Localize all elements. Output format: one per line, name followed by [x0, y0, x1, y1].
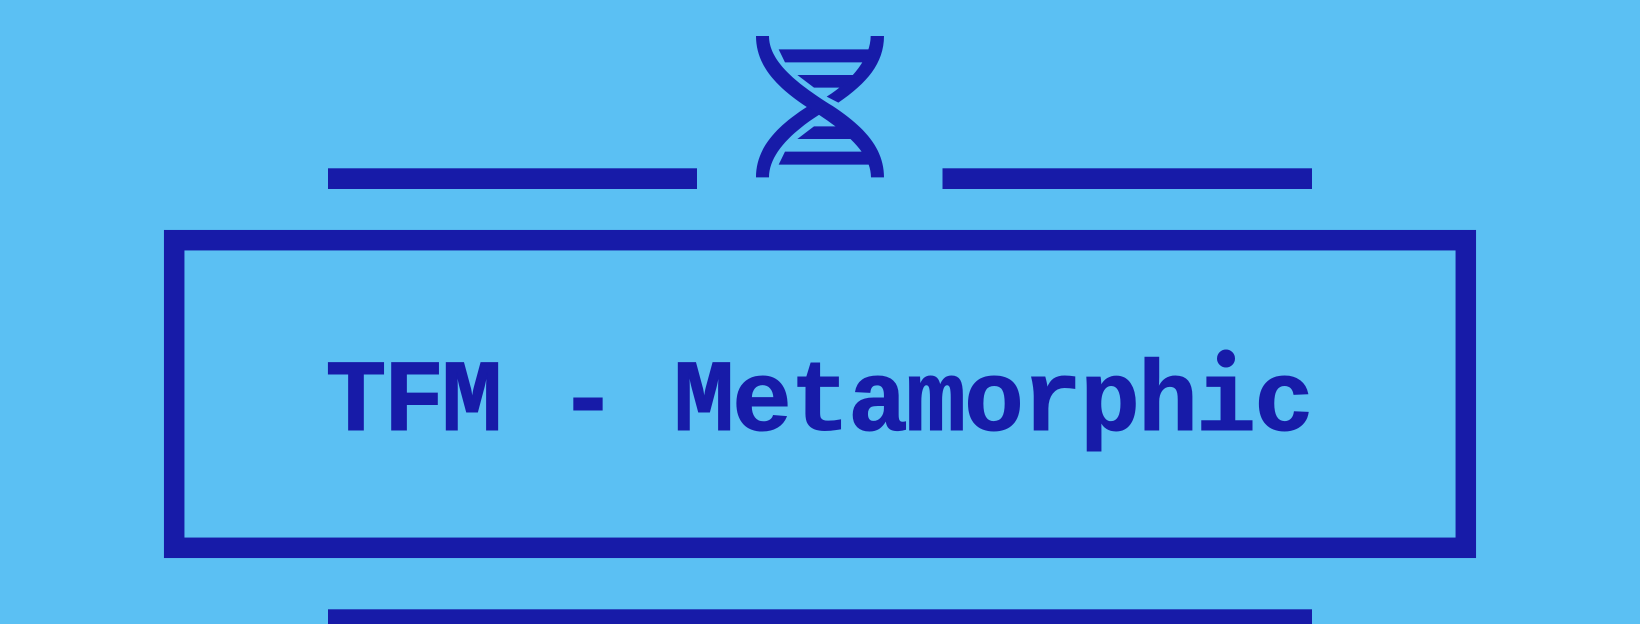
top rule: left	[328, 168, 697, 189]
title: -	[500, 348, 676, 461]
bottom rule	[328, 609, 1312, 624]
i-dot: round	[1217, 350, 1238, 370]
title: M	[673, 345, 735, 461]
title frame	[174, 240, 1466, 548]
icon: DNA helix	[756, 36, 884, 177]
title: TFM	[325, 345, 503, 461]
title: etamorphic	[732, 348, 1314, 461]
top rule: right	[942, 168, 1312, 189]
